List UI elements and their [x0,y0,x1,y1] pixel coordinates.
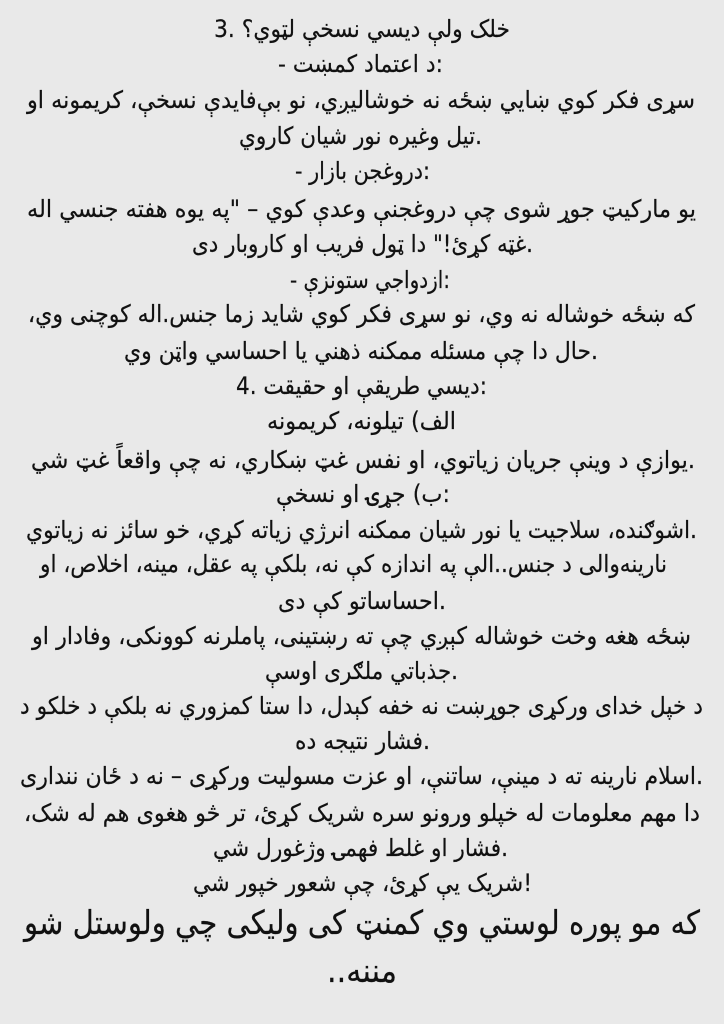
text block: share with brothers [24,799,700,862]
text block: marital problems: :ازدواجي ستونزې - [290,266,450,297]
text block: herbs and remedies [26,480,697,618]
text block: when a woman is happy [31,622,691,688]
text block: lack of confidence: :د اعتماد کمښت - [278,50,443,78]
text block: body structure [20,692,703,755]
text block: when a woman is happy: .جذباتي ملګری اوسې [265,657,458,688]
text block: herbs and remedies: .احساساتو کې دی [278,587,446,618]
text block: lack of confidence [26,50,695,150]
text block: share with brothers: .فشار او غلط فهمۍ وژغورل شي [213,834,508,862]
text block: oils and creams: .یوازې د وینې جریان زیاتوي، او نفس غټ ښکاري، نه چې واقعاً غټ شي [31,443,695,477]
text block: fake market: .غټه کړئ!" دا ټول فریب او کاروبار دی [192,230,533,259]
call to action: share: !شریک یې کړئ، چې شعور خپور شي [193,869,532,900]
text block: herbs and remedies: نارینه‌والی د جنس..الې په اندازه کې نه، بلکې په عقل، مینه، اخلاص، او [39,550,667,581]
text block: fake market [27,157,696,259]
text block: fake market: یو مارکیټ جوړ شوی چې دروغجنې وعدې کوي – "په یوه هفته جنسي اله [27,195,696,226]
closing message: مننه.. [327,951,397,990]
heading: section 3: خلک ولې دیسي نسخې لټوي؟ ⁦3.⁩ [214,15,510,46]
text block: fake market: :دروغجن بازار - [295,157,430,185]
text block: oils and creams [31,407,695,477]
text block: lack of confidence: سړی فکر کوي ښایي ښځه نه خوشالیږي، نو بې‌فایدې نسخې، کریمونه او [26,86,695,117]
text block: marital problems: .حال دا چې مسئله ممکنه ذهني یا احساسي واټن وي [124,337,598,368]
text block: marital problems [28,266,696,368]
heading: section 4: :دیسي طریقې او حقیقت ⁦4.⁩ [236,372,487,403]
text block: lack of confidence: .تیل وغیره نور شیان کاروي [239,122,482,150]
text block: oils and creams: الف) تیلونه، کریمونه [267,407,456,435]
text block: herbs and remedies: :ب) جړۍ او نسخې [276,480,450,511]
text block: when a woman is happy: ښځه هغه وخت خوشاله کېږي چې ته رښتینی، پاملرنه کوونکی، وفادار او [31,622,691,653]
text block: body structure: .فشار نتیجه ده [295,727,430,755]
closing message [22,903,700,990]
